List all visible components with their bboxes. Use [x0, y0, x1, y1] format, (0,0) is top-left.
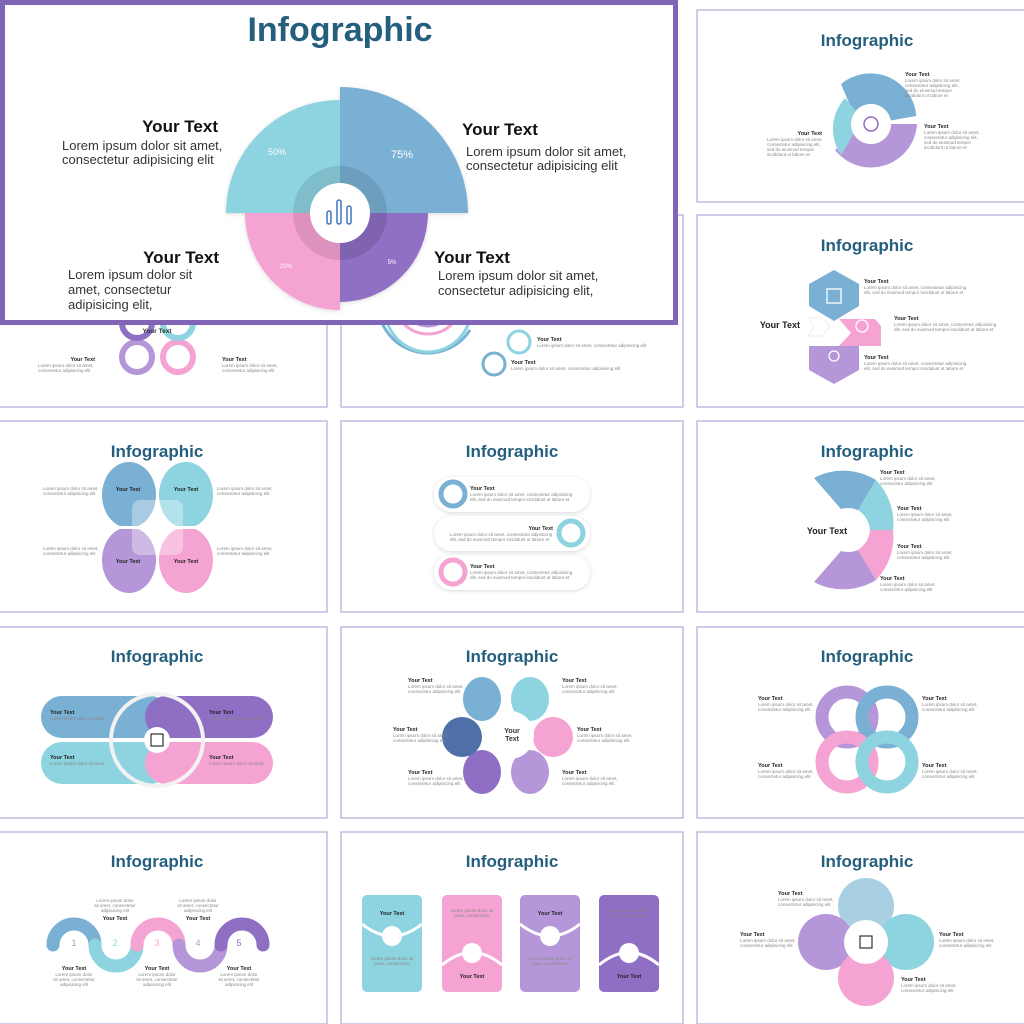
text: cycle labels: consectetur adipisicing elit,	[924, 135, 978, 140]
slide: wave timeline: 5	[236, 938, 242, 948]
slide: four petals: consectetur adipisicing elit	[217, 491, 270, 496]
slide: arrow shapes: Your Text	[760, 320, 800, 330]
slide: flower of six petals: Your Text	[562, 678, 587, 684]
chart: petals	[100, 462, 215, 593]
text: top right: consectetur adipisicing elit	[466, 158, 618, 173]
slide: four circles flower	[697, 832, 1024, 1024]
text: cycle labels: Lorem ipsum dolor sit amet,	[767, 137, 823, 142]
slide: knot rings: consectetur adipisicing elit	[922, 774, 975, 779]
slide: wave timeline: Your Text	[186, 916, 210, 922]
slide: wave timeline: Your Text	[227, 966, 251, 972]
slide: knot rings: Your Text	[758, 696, 783, 702]
text: cycle labels: consectetur adipisicing elit,	[767, 142, 821, 147]
title: Infographic	[247, 11, 433, 49]
pills	[434, 477, 590, 590]
text: cycle labels: Lorem ipsum dolor sit amet,	[924, 130, 980, 135]
slide: pill list: elit, sed do eiusmod tempor incididunt ut labore et	[470, 575, 570, 580]
text: cycle labels	[767, 72, 980, 157]
slide: flower of six petals: Lorem ipsum dolor sit amet,	[562, 684, 618, 689]
slide: flower of six petals: consectetur adipisicing elit	[562, 781, 615, 786]
slide: wave timeline: Your Text	[103, 916, 127, 922]
slide: partly hidden circles: Your Text	[70, 357, 95, 363]
chart: wave	[53, 924, 263, 966]
slide: half ring: Your Text	[897, 544, 922, 550]
slide: wave timeline: adipisicing elit	[101, 908, 130, 913]
slide: wave timeline: adipisicing elit	[60, 982, 89, 987]
slide: arrow shapes: Infographic	[821, 236, 913, 255]
slide: wave timeline: 1	[71, 938, 77, 948]
slide: wave timeline: Lorem ipsum dolor	[55, 972, 93, 977]
slide: pill rows with center circle: Lorem ipsum dolor sit amet,	[50, 716, 106, 721]
slide: wave timeline: sit amet, consectetur	[94, 903, 136, 908]
slide: partly hidden circles: Lorem ipsum dolor sit amet,	[38, 363, 94, 368]
chart: quarter pie: 20%	[280, 264, 293, 270]
slide: partly hidden circles: consectetur adipisicing elit	[38, 368, 91, 373]
chart: petals: Text	[505, 736, 520, 743]
slide: pill list: Your Text	[470, 564, 495, 570]
slide: flower of six petals: consectetur adipisicing elit	[408, 689, 461, 694]
cards: amet, consectetur	[454, 913, 490, 918]
slide: pill rows with center circle: Your Text	[50, 710, 75, 716]
slide: cycle three segments: Infographic	[821, 31, 913, 50]
chart: circles	[798, 878, 934, 1006]
text: bottom left: adipisicing elit,	[68, 297, 153, 312]
slide: pill rows with center circle: Your Text	[209, 755, 234, 761]
slide: wave timeline: 2	[112, 938, 118, 948]
slide: four circles flower: consectetur adipisicing elit	[939, 943, 992, 948]
text: top left: consectetur adipisicing elit	[62, 152, 214, 167]
slide: pill list	[341, 421, 683, 612]
slide: flower of six petals: Your Text	[408, 770, 433, 776]
text: top left	[62, 117, 222, 167]
slide: wave timeline: Infographic	[111, 852, 203, 871]
slide: four circles flower: consectetur adipisicing elit	[778, 902, 831, 907]
slide: half ring: consectetur adipisicing elit	[897, 555, 950, 560]
text: cycle labels: consectetur adipisicing elit,	[905, 83, 959, 88]
slide: half ring	[697, 421, 1024, 612]
slide: four circles flower: consectetur adipisicing elit	[740, 943, 793, 948]
text: bottom left: Lorem ipsum dolor sit	[68, 267, 193, 282]
slide: four petals: Lorem ipsum dolor sit amet,	[43, 546, 99, 551]
slide: half ring: Infographic	[821, 442, 913, 461]
slide: pill list: Your Text	[470, 486, 495, 492]
slide: knot rings: Lorem ipsum dolor sit amet,	[922, 702, 978, 707]
slide: knot rings	[697, 627, 1024, 818]
slide: half ring: Lorem ipsum dolor sit amet,	[880, 476, 936, 481]
cards: Lorem ipsum dolor sit	[450, 908, 494, 913]
slide: flower of six petals: consectetur adipisicing elit	[408, 781, 461, 786]
chart: petals: Your Text	[174, 559, 198, 565]
slide: wave timeline: sit amet, consectetur	[177, 903, 219, 908]
text: arrow labels	[864, 279, 997, 371]
slide: pill list: elit, sed do eiusmod tempor incididunt ut labore et	[470, 497, 570, 502]
text: cycle labels: incididunt ut labore et	[924, 145, 968, 150]
slide: four petals: Lorem ipsum dolor sit amet,	[217, 546, 273, 551]
chart: petals: Your	[504, 728, 520, 735]
text: top right	[462, 120, 626, 173]
slide: wave timeline: Lorem ipsum dolor	[179, 898, 217, 903]
text: bottom right: Your Text	[434, 248, 510, 267]
slide: four circles flower: Your Text	[740, 932, 765, 938]
slide: partly hidden circles: Your Text	[142, 328, 172, 335]
slide: arrow shapes	[697, 215, 1024, 407]
cards: Lorem ipsum dolor sit	[607, 908, 651, 913]
chart: quarter pie: 5%	[388, 260, 397, 266]
chart: quarter pie	[226, 87, 468, 310]
slide: flower of six petals: Your Text	[562, 770, 587, 776]
slide: four cards	[341, 832, 683, 1024]
cards: Your Text	[460, 974, 484, 980]
slide: partly hidden concentric arcs: Lorem ipsum dolor sit amet, consectetur adipisicing elit	[511, 366, 621, 371]
slide: half ring: Lorem ipsum dolor sit amet,	[897, 550, 953, 555]
text: cycle labels: incididunt ut labore et	[767, 152, 811, 157]
slide: half ring: consectetur adipisicing elit	[897, 517, 950, 522]
slide: half ring: Lorem ipsum dolor sit amet,	[897, 512, 953, 517]
slide: four circles flower: Lorem ipsum dolor sit amet,	[901, 983, 957, 988]
text: top right: Your Text	[462, 120, 538, 139]
slide: flower of six petals: Lorem ipsum dolor sit amet,	[393, 733, 449, 738]
slide: partly hidden circles	[0, 215, 327, 407]
slide: four circles flower: Lorem ipsum dolor sit amet,	[939, 938, 995, 943]
slide: wave timeline: Your Text	[145, 966, 169, 972]
slide: flower of six petals: Lorem ipsum dolor sit amet,	[408, 684, 464, 689]
cards: Lorem ipsum dolor sit	[370, 956, 414, 961]
text: arrow labels: Your Text	[894, 316, 919, 322]
slide: flower of six petals: Your Text	[577, 727, 602, 733]
chart: petals: Your Text	[116, 559, 140, 565]
text: arrow labels: elit, sed do eiusmod tempor incididunt ut labore et	[864, 290, 964, 295]
slide: four cards: Infographic	[466, 852, 558, 871]
cards: Your Text	[617, 974, 641, 980]
text: cycle labels: sed do eiusmod tempor	[767, 147, 815, 152]
text: bottom right	[434, 248, 598, 298]
slide: flower of six petals: Lorem ipsum dolor sit amet,	[408, 776, 464, 781]
chart: petals: Your Text	[116, 487, 140, 493]
slide: four circles flower: Your Text	[778, 891, 803, 897]
slide: flower of six petals: consectetur adipisicing elit	[562, 689, 615, 694]
slide: pill rows with center circle: Your Text	[50, 755, 75, 761]
chart: petals	[442, 677, 573, 794]
slide: partly hidden circles: Your Text	[222, 357, 247, 363]
slide: wave timeline: adipisicing elit	[143, 982, 172, 987]
slide: flower of six petals: consectetur adipisicing elit	[393, 738, 446, 743]
slide: knot rings: consectetur adipisicing elit	[758, 707, 811, 712]
slide: knot rings: Your Text	[922, 696, 947, 702]
text: cycle labels: Your Text	[905, 72, 930, 78]
cards: amet, consectetur	[374, 961, 410, 966]
chart: half ring	[814, 471, 893, 589]
text: cycle labels: Lorem ipsum dolor sit amet,	[905, 78, 961, 83]
slide: wave timeline: Lorem ipsum dolor	[138, 972, 176, 977]
slide: flower of six petals: Lorem ipsum dolor sit amet,	[562, 776, 618, 781]
slide: pill list: Lorem ipsum dolor sit amet, consectetur adipisicing	[470, 570, 573, 575]
slide: pill rows with center circle: Infographic	[111, 647, 203, 666]
chart: rings	[822, 692, 912, 787]
text: cycle labels: incididunt ut labore et	[905, 93, 949, 98]
chart: quarter pie: 50%	[268, 147, 286, 157]
cards: Your Text	[538, 911, 562, 917]
featured slide: quarter pie	[2, 2, 676, 322]
slide: four petals: Infographic	[111, 442, 203, 461]
slide: partly hidden concentric arcs: Your Text	[511, 360, 536, 366]
text: cycle labels: sed do eiusmod tempor	[905, 88, 953, 93]
slide: half ring: Your Text	[897, 506, 922, 512]
slide: partly hidden circles: consectetur adipisicing elit	[222, 368, 275, 373]
slide: knot rings: consectetur adipisicing elit	[758, 774, 811, 779]
slide: pill rows with center circle: Lorem ipsum dolor sit amet,	[209, 716, 265, 721]
text: bottom left	[68, 248, 219, 312]
text: cycle labels: sed do eiusmod tempor	[924, 140, 972, 145]
arrows	[808, 270, 881, 384]
slide: four circles flower: Your Text	[939, 932, 964, 938]
cards: amet, consectetur	[611, 913, 647, 918]
slide: four petals: Lorem ipsum dolor sit amet,	[217, 486, 273, 491]
slide: pill rows with center circle: Your Text	[209, 710, 234, 716]
cards	[362, 895, 659, 992]
text: top left: Your Text	[142, 117, 218, 136]
text: cycle labels: Your Text	[924, 124, 949, 130]
slide: wave timeline: adipisicing elit	[225, 982, 254, 987]
text: bottom left: amet, consectetur	[68, 282, 172, 297]
slide: wave timeline: sit amet, consectetur	[218, 977, 260, 982]
slide: four petals: consectetur adipisicing elit	[43, 491, 96, 496]
slide: half ring: Your Text	[880, 576, 905, 582]
slide: knot rings: Your Text	[758, 763, 783, 769]
slide: partly hidden concentric arcs: Your Text	[537, 337, 562, 343]
text: arrow labels: Lorem ipsum dolor sit amet, consectetur adipisicing	[894, 322, 997, 327]
chart: pills	[41, 694, 273, 786]
text: arrow labels: Your Text	[864, 279, 889, 285]
slide: pill list: Lorem ipsum dolor sit amet, consectetur adipisicing	[450, 532, 553, 537]
slide: half ring: Your Text	[880, 470, 905, 476]
slide: flower of six petals: Your Text	[408, 678, 433, 684]
slide: wave timeline: adipisicing elit	[184, 908, 213, 913]
slide: partly hidden concentric arcs	[341, 215, 683, 407]
slide: wave timeline: 4	[195, 938, 201, 948]
text: arrow labels: Lorem ipsum dolor sit amet, consectetur adipisicing	[864, 361, 967, 366]
slide: cycle three segments	[697, 10, 1024, 202]
slide: wave timeline: 3	[154, 938, 160, 948]
chart: cycle segments	[833, 73, 917, 167]
slide: pill list: Infographic	[466, 442, 558, 461]
slide: knot rings: Lorem ipsum dolor sit amet,	[758, 769, 814, 774]
slide: half ring: Lorem ipsum dolor sit amet,	[880, 582, 936, 587]
slide: partly hidden concentric arcs: Lorem ipsum dolor sit amet, consectetur adipisicing elit	[537, 343, 647, 348]
slide: knot rings: Lorem ipsum dolor sit amet,	[758, 702, 814, 707]
cards: amet, consectetur	[532, 961, 568, 966]
chart: petals: Your Text	[174, 487, 198, 493]
slide: knot rings: Your Text	[922, 763, 947, 769]
text: bottom right: consectetur adipisicing elit,	[438, 283, 593, 298]
slide: wave timeline: Lorem ipsum dolor	[96, 898, 134, 903]
slide: pill list: Your Text	[528, 526, 553, 532]
slide: four petals: consectetur adipisicing elit	[217, 551, 270, 556]
slide: wave timeline	[0, 832, 327, 1024]
slide: four circles flower: consectetur adipisicing elit	[901, 988, 954, 993]
slide: four circles flower: Infographic	[821, 852, 913, 871]
slide: flower of six petals: Lorem ipsum dolor sit amet,	[577, 733, 633, 738]
slide: pill rows with center circle: Lorem ipsum dolor sit amet,	[50, 761, 106, 766]
slide: four circles flower: Your Text	[901, 977, 926, 983]
text: bottom right: Lorem ipsum dolor sit amet,	[438, 268, 598, 283]
text: top right: Lorem ipsum dolor sit amet,	[466, 144, 626, 159]
slide: wave timeline: Your Text	[62, 966, 86, 972]
text: bottom left: Your Text	[143, 248, 219, 267]
slide: knot rings: consectetur adipisicing elit	[922, 707, 975, 712]
slide: flower of six petals: consectetur adipisicing elit	[577, 738, 630, 743]
slide: flower of six petals: Your Text	[393, 727, 418, 733]
slide: knot rings: Lorem ipsum dolor sit amet,	[922, 769, 978, 774]
text: cycle labels: Your Text	[797, 131, 822, 137]
slide: flower of six petals: Infographic	[466, 647, 558, 666]
slide: half ring: consectetur adipisicing elit	[880, 587, 933, 592]
chart: quarter pie: 75%	[391, 149, 413, 161]
text: arrow labels: elit, sed do eiusmod tempor incididunt ut labore et	[864, 366, 964, 371]
slide: wave timeline: sit amet, consectetur	[53, 977, 95, 982]
cards: Your Text	[380, 911, 404, 917]
text: arrow labels: Your Text	[864, 355, 889, 361]
slide: half ring: consectetur adipisicing elit	[880, 481, 933, 486]
slide: four petals: consectetur adipisicing elit	[43, 551, 96, 556]
slide: wave timeline: sit amet, consectetur	[136, 977, 178, 982]
slide: knot rings: Infographic	[821, 647, 913, 666]
slide: four petals: Lorem ipsum dolor sit amet,	[43, 486, 99, 491]
slide: four circles flower: Lorem ipsum dolor sit amet,	[778, 897, 834, 902]
slide: pill list: Lorem ipsum dolor sit amet, consectetur adipisicing	[470, 492, 573, 497]
slide: pill rows with center circle: Lorem ipsum dolor sit amet,	[209, 761, 265, 766]
text: arrow labels: Lorem ipsum dolor sit amet, consectetur adipisicing	[864, 285, 967, 290]
slide: four petals	[0, 421, 327, 612]
slide: flower of six petals	[341, 627, 683, 818]
slide: pill rows with center circle	[0, 627, 327, 818]
slide: pill list: elit, sed do eiusmod tempor incididunt ut labore et	[450, 537, 550, 542]
slide: wave timeline: Lorem ipsum dolor	[220, 972, 258, 977]
cards: Lorem ipsum dolor sit	[528, 956, 572, 961]
slide: partly hidden circles: Lorem ipsum dolor sit amet,	[222, 363, 278, 368]
slide: four circles flower: Lorem ipsum dolor sit amet,	[740, 938, 796, 943]
text: top left: Lorem ipsum dolor sit amet,	[62, 138, 222, 153]
text: arrow labels: elit, sed do eiusmod tempor incididunt ut labore et	[894, 327, 994, 332]
slide: half ring: Your Text	[807, 526, 847, 536]
